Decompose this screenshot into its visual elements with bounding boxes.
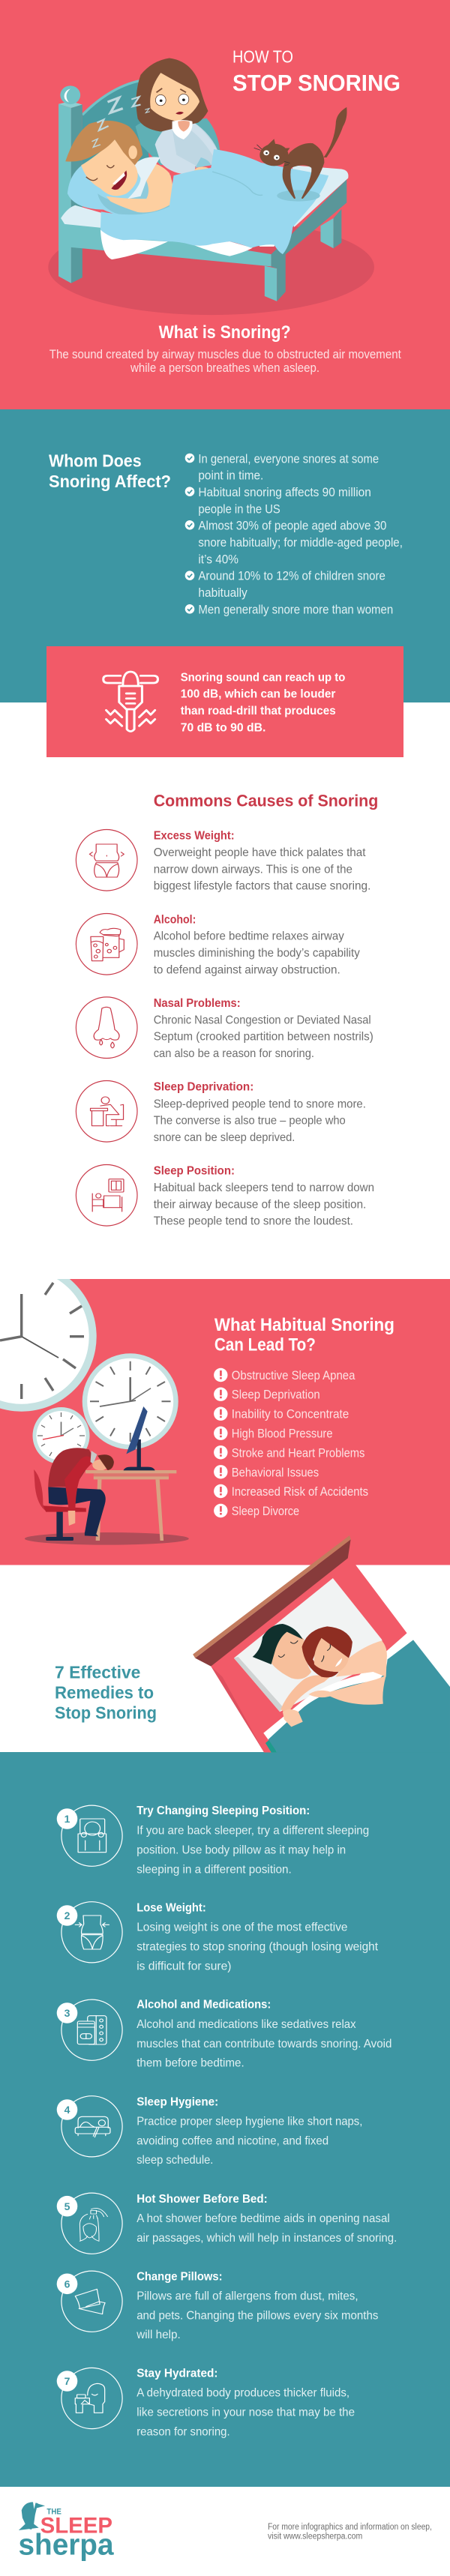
callout text xyxy=(181,671,346,734)
text xyxy=(154,1165,374,1228)
text: and pets. Changing the pillows every six months xyxy=(136,2309,378,2322)
text: is difficult for sure) xyxy=(136,1960,231,1972)
bullet list: Around 10% to 12% of children snore xyxy=(198,569,386,583)
heading: Snoring Affect? xyxy=(49,472,171,491)
text: sleep schedule. xyxy=(136,2154,213,2167)
text xyxy=(154,913,360,976)
text xyxy=(136,1999,392,2070)
text: Alcohol and Medications: xyxy=(136,1999,271,2011)
panel: whom does snoring affect xyxy=(0,409,450,702)
callout text: 70 dB to 90 dB. xyxy=(181,721,266,734)
text xyxy=(136,2368,355,2439)
icon: bed with clock and cigarette xyxy=(57,2096,122,2157)
list of consequences: Inability to Concentrate xyxy=(232,1407,349,1421)
text xyxy=(154,1081,366,1144)
text: strategies to stop snoring (though losing weight xyxy=(136,1941,379,1954)
text: These people tend to snore the loudest. xyxy=(154,1215,353,1228)
panel: remedies xyxy=(57,1805,397,2439)
cause: sleep deprivation xyxy=(76,1081,366,1144)
text: Practice proper sleep hygiene like short naps, xyxy=(136,2115,362,2128)
text: Excess Weight: xyxy=(154,829,235,842)
text: to defend against airway obstruction. xyxy=(154,963,340,976)
icon: slim waist xyxy=(57,1902,122,1963)
illustration: medium clock xyxy=(82,1353,178,1449)
heading: remedies xyxy=(55,1662,157,1722)
bullet list: Habitual snoring affects 90 million xyxy=(198,485,371,499)
bullet list: snore habitually; for middle-aged people, xyxy=(198,535,403,550)
text: Change Pillows: xyxy=(136,2270,223,2283)
text: Septum (crooked partition between nostrils) xyxy=(154,1031,374,1044)
text xyxy=(136,1805,369,1876)
text xyxy=(136,1901,379,1972)
text: If you are back sleeper, try a different sleeping xyxy=(136,1824,369,1837)
text: reason for snoring. xyxy=(136,2426,230,2439)
list of consequences: Increased Risk of Accidents xyxy=(232,1484,368,1499)
remedy 7 xyxy=(57,2368,355,2439)
text: snore can be sleep deprived. xyxy=(154,1131,295,1144)
bullet list: it’s 40% xyxy=(198,552,238,566)
icon: pillows: 6 xyxy=(64,2278,70,2290)
callout text: 100 dB, which can be louder xyxy=(181,688,335,701)
text xyxy=(136,2095,362,2167)
title: STOP SNORING xyxy=(232,70,400,96)
remedy 3 xyxy=(57,1999,392,2070)
bullet list xyxy=(198,451,403,616)
text: avoiding coffee and nicotine, and fixed xyxy=(136,2134,328,2147)
heading: remedies: Remedies to xyxy=(55,1683,154,1703)
list of consequences: Obstructive Sleep Apnea xyxy=(232,1368,356,1382)
list of consequences xyxy=(232,1368,368,1518)
text: muscles that can contribute towards snoring. Avoid xyxy=(136,2038,392,2050)
icon: nose xyxy=(76,997,137,1058)
text: their airway because of the sleep position. xyxy=(154,1198,366,1211)
icon: beer xyxy=(76,913,137,975)
bullet list: In general, everyone snores at some xyxy=(198,451,379,466)
callout text: than road-drill that produces xyxy=(181,705,336,717)
remedy 1 xyxy=(57,1805,369,1876)
warning bullet icons xyxy=(214,1368,227,1517)
text xyxy=(154,997,374,1060)
icon: waist xyxy=(76,829,137,891)
text xyxy=(136,2270,378,2341)
list of consequences: Sleep Divorce xyxy=(232,1504,299,1518)
text: Sleep Deprivation: xyxy=(154,1081,254,1094)
icon: person drinking water xyxy=(57,2368,122,2429)
bullet list: people in the US xyxy=(198,502,280,516)
icon: person in bed xyxy=(57,1805,122,1866)
logo: the sleep sherpa: sherpa xyxy=(18,2528,114,2561)
text: A dehydrated body produces thicker fluids, xyxy=(136,2387,350,2400)
text: Alcohol before bedtime relaxes airway xyxy=(154,930,344,943)
text: A hot shower before bedtime aids in opening nasal xyxy=(136,2212,390,2225)
text: Pillows are full of allergens from dust, mites, xyxy=(136,2290,358,2302)
list of consequences: Behavioral Issues xyxy=(232,1465,319,1479)
heading: What Habitual Snoring xyxy=(214,1315,394,1335)
checkmark bullet icons xyxy=(185,454,194,614)
heading xyxy=(49,451,171,491)
icon: bed with clock and cigarette: 4 xyxy=(64,2104,70,2116)
footer note: visit www.sleepsherpa.com xyxy=(268,2533,362,2542)
text: will help. xyxy=(136,2329,181,2341)
icon: shower xyxy=(57,2193,122,2254)
remedy 4 xyxy=(57,2095,362,2167)
callout text: Snoring sound can reach up to xyxy=(181,671,346,684)
heading xyxy=(214,1315,394,1355)
logo: the sleep sherpa: THE xyxy=(46,2507,62,2516)
bullet list: Men generally snore more than women xyxy=(198,602,393,616)
text: like secretions in your nose that may be the xyxy=(136,2407,355,2419)
bullet list: point in time. xyxy=(198,469,263,483)
text block: snoring definition: The sound created by airway muscles due to obstructed air movement xyxy=(50,347,401,361)
heading: Commons Causes of Snoring xyxy=(154,791,378,810)
list of consequences: Sleep Deprivation xyxy=(232,1388,320,1402)
cause: sleep position xyxy=(76,1165,374,1228)
panel: common causes xyxy=(76,791,378,1228)
text: muscles diminishing the body’s capability xyxy=(154,947,360,960)
icon: pills and bottle xyxy=(57,1999,122,2060)
list of consequences: Stroke and Heart Problems xyxy=(232,1445,364,1460)
text xyxy=(136,2193,397,2245)
panel: what habitual snoring can lead to xyxy=(0,1262,450,1565)
text: Sleep-deprived people tend to snore more. xyxy=(154,1098,366,1110)
text: Try Changing Sleeping Position: xyxy=(136,1805,310,1817)
icon: person in bed: 1 xyxy=(64,1813,70,1825)
panel: remedies background xyxy=(0,1752,450,2487)
text: biggest lifestyle factors that cause snoring. xyxy=(154,880,370,893)
bullet list: Almost 30% of people aged above 30 xyxy=(198,519,386,533)
text xyxy=(154,829,370,893)
heading: Whom Does xyxy=(49,451,142,471)
list of consequences: High Blood Pressure xyxy=(232,1427,333,1441)
cause: nasal problems xyxy=(76,997,374,1060)
text: Sleep Hygiene: xyxy=(136,2095,218,2108)
text block: snoring definition xyxy=(50,347,401,375)
remedy 6 xyxy=(57,2270,378,2341)
heading: what is snoring: What is Snoring? xyxy=(159,322,291,343)
text: Losing weight is one of the most effective xyxy=(136,1922,348,1934)
heading: Can Lead To? xyxy=(214,1335,316,1355)
illustration: small clock xyxy=(33,1407,90,1464)
cause: excess weight xyxy=(76,829,370,893)
text: The converse is also true – people who xyxy=(154,1115,346,1128)
icon: person drinking water: 7 xyxy=(64,2375,70,2387)
icon: road drill xyxy=(104,672,158,731)
illustration: clocks xyxy=(0,1279,97,1412)
text: Alcohol and medications like sedatives relax xyxy=(136,2018,356,2031)
bullet list: habitually xyxy=(198,586,248,600)
callout: road drill comparison xyxy=(46,646,404,757)
icon: shower: 5 xyxy=(64,2200,70,2212)
text: Sleep Position: xyxy=(154,1165,235,1178)
remedy 5 xyxy=(57,2193,397,2254)
text block: snoring definition: while a person breathes when asleep. xyxy=(130,361,320,375)
icon: slim waist: 2 xyxy=(64,1910,70,1922)
footer note xyxy=(268,2523,432,2542)
icon: bed and window xyxy=(76,1165,137,1226)
icon: pillows xyxy=(57,2271,122,2332)
text: them before bedtime. xyxy=(136,2057,244,2070)
illustration: couple sleeping in bed xyxy=(193,1535,450,1752)
illustration: snoring man, worried woman and cat on a bed xyxy=(48,58,374,315)
logo: the sleep sherpa xyxy=(18,2502,114,2561)
text: Habitual back sleepers tend to narrow down xyxy=(154,1182,374,1194)
illustration: man asleep at desk xyxy=(25,1406,189,1545)
remedy 2 xyxy=(57,1901,379,1972)
icon: person asleep at desk xyxy=(76,1081,137,1142)
text: Lose Weight: xyxy=(136,1901,206,1914)
footer note: For more infographics and information on sleep, xyxy=(268,2523,432,2532)
text: Chronic Nasal Congestion or Deviated Nasal xyxy=(154,1014,371,1026)
text: position. Use body pillow as it may help in xyxy=(136,1844,346,1856)
cause: alcohol xyxy=(76,913,360,976)
text: Hot Shower Before Bed: xyxy=(136,2193,268,2206)
heading: remedies: 7 Effective xyxy=(55,1662,140,1682)
text: can also be a reason for snoring. xyxy=(154,1047,314,1060)
heading: remedies: Stop Snoring xyxy=(55,1703,157,1722)
text: sleeping in a different position. xyxy=(136,1863,292,1876)
text: air passages, which will help in instances of snoring. xyxy=(136,2232,397,2245)
text: Stay Hydrated: xyxy=(136,2368,218,2380)
text: Overweight people have thick palates that xyxy=(154,846,366,859)
footer xyxy=(18,2502,432,2561)
title xyxy=(232,47,400,96)
panel: hero xyxy=(0,0,450,409)
text: Alcohol: xyxy=(154,913,196,926)
title: HOW TO xyxy=(232,47,293,67)
icon: pills and bottle: 3 xyxy=(64,2007,70,2019)
text: Nasal Problems: xyxy=(154,997,241,1010)
logo: the sleep sherpa: SLEEP xyxy=(40,2513,112,2538)
text: narrow down airways. This is one of the xyxy=(154,863,352,876)
